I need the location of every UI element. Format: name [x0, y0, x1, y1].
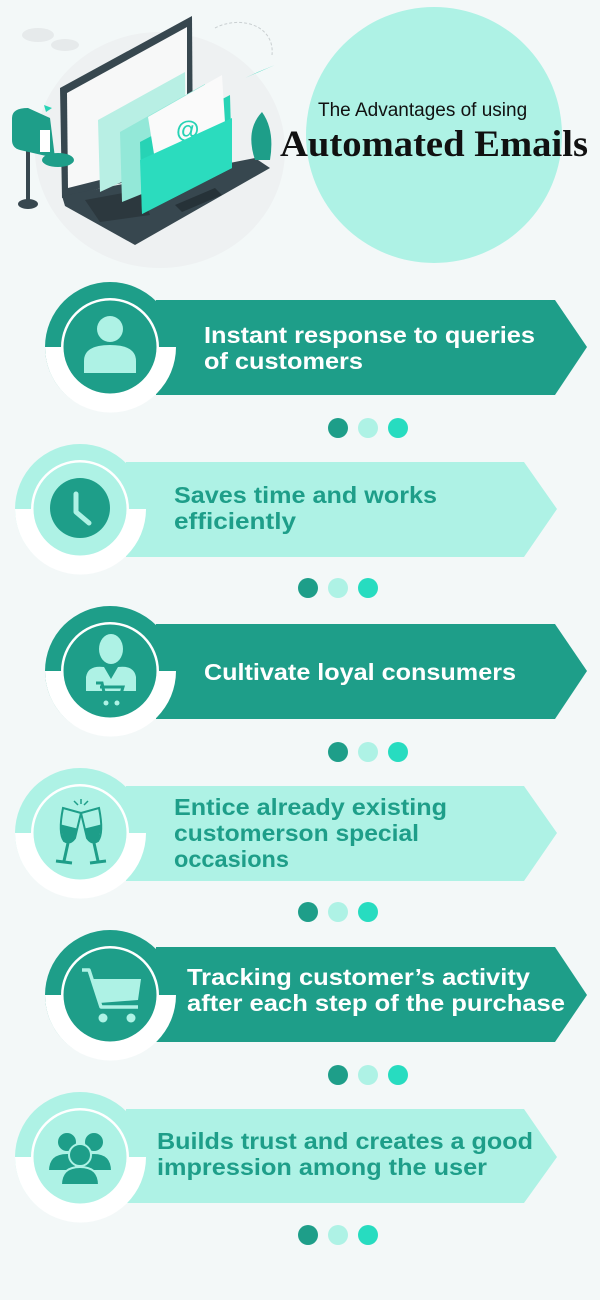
laptop — [60, 16, 193, 198]
title circle — [280, 7, 588, 263]
text — [157, 1128, 533, 1180]
text: efficiently — [174, 508, 296, 534]
panel 3: loyal consumers — [45, 606, 587, 736]
text: of customers — [204, 348, 363, 374]
panel 1: instant response — [45, 282, 587, 412]
icon: toasting glasses — [56, 799, 106, 863]
icon: person — [84, 316, 136, 373]
title text: The Advantages of using — [318, 100, 527, 121]
plane and leaf — [245, 65, 275, 78]
text — [174, 482, 437, 534]
dots 3 — [328, 742, 408, 762]
dots 1 — [328, 418, 408, 438]
header illustration: laptop with emails: @ — [176, 117, 199, 144]
dots 2 — [298, 578, 378, 598]
dots 4 — [298, 902, 378, 922]
icon: clock — [50, 478, 110, 538]
text: Entice already existing — [174, 794, 447, 820]
title text: Automated Emails — [280, 124, 588, 165]
title text — [280, 100, 588, 165]
panel 6: builds trust — [15, 1092, 557, 1222]
dots 5 — [328, 1065, 408, 1085]
panel 5: tracking activity — [45, 930, 587, 1060]
mailbox — [26, 150, 30, 205]
text: impression among the user — [157, 1154, 487, 1180]
text: Cultivate loyal consumers — [204, 659, 516, 685]
envelopes — [98, 72, 186, 192]
text: Saves time and works — [174, 482, 437, 508]
text: Builds trust and creates a good — [157, 1128, 533, 1154]
text — [187, 964, 565, 1016]
text — [204, 322, 535, 374]
text: Tracking customer’s activity — [187, 964, 530, 990]
text — [174, 794, 447, 872]
text: after each step of the purchase — [187, 990, 565, 1016]
icon: group of people — [48, 1132, 112, 1185]
icon: shopping cart — [82, 970, 141, 1022]
header illustration: laptop with emails — [12, 16, 285, 268]
text: Instant response to queries — [204, 322, 535, 348]
dots 6 — [298, 1225, 378, 1245]
icon: businessman with cart — [86, 634, 136, 706]
text: customerson special — [174, 820, 419, 846]
panel 4: entice customers — [15, 768, 557, 898]
panel 2: saves time — [15, 444, 557, 574]
text: occasions — [174, 846, 289, 872]
